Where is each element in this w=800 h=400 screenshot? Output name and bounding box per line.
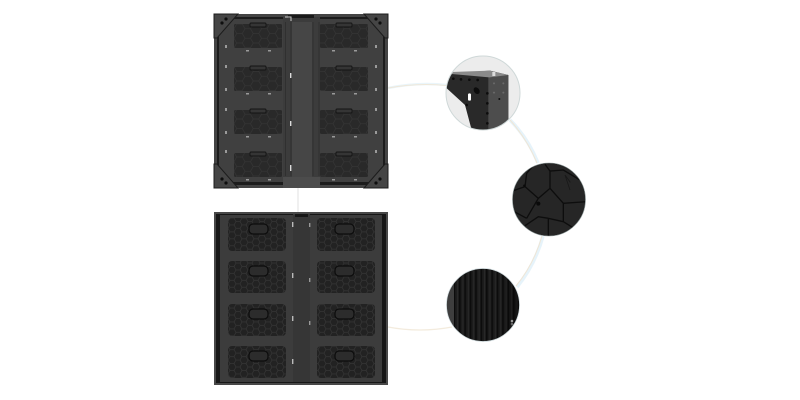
panel: bottom cabinet rear view	[214, 212, 388, 385]
corner brackets	[214, 14, 388, 188]
panel: top cabinet rear view	[214, 14, 388, 188]
hex modules	[228, 218, 375, 378]
infographic canvas	[214, 14, 586, 385]
detail circle outline 3	[446, 268, 520, 342]
screw holes	[225, 45, 377, 180]
module handles	[249, 224, 354, 361]
center spine	[292, 214, 310, 382]
hex modules	[234, 24, 368, 177]
detail circle outline 2	[512, 163, 586, 236]
detail circle: corner bracket close-up	[446, 56, 520, 130]
module handles	[250, 23, 352, 156]
detail circle: hexagon texture close-up	[512, 163, 586, 236]
center spine	[283, 15, 320, 188]
detail circle: ribbed heat sink close-up	[446, 268, 521, 342]
detail circle outline 1	[446, 56, 520, 130]
connector arcs linking detail circles	[298, 84, 543, 330]
